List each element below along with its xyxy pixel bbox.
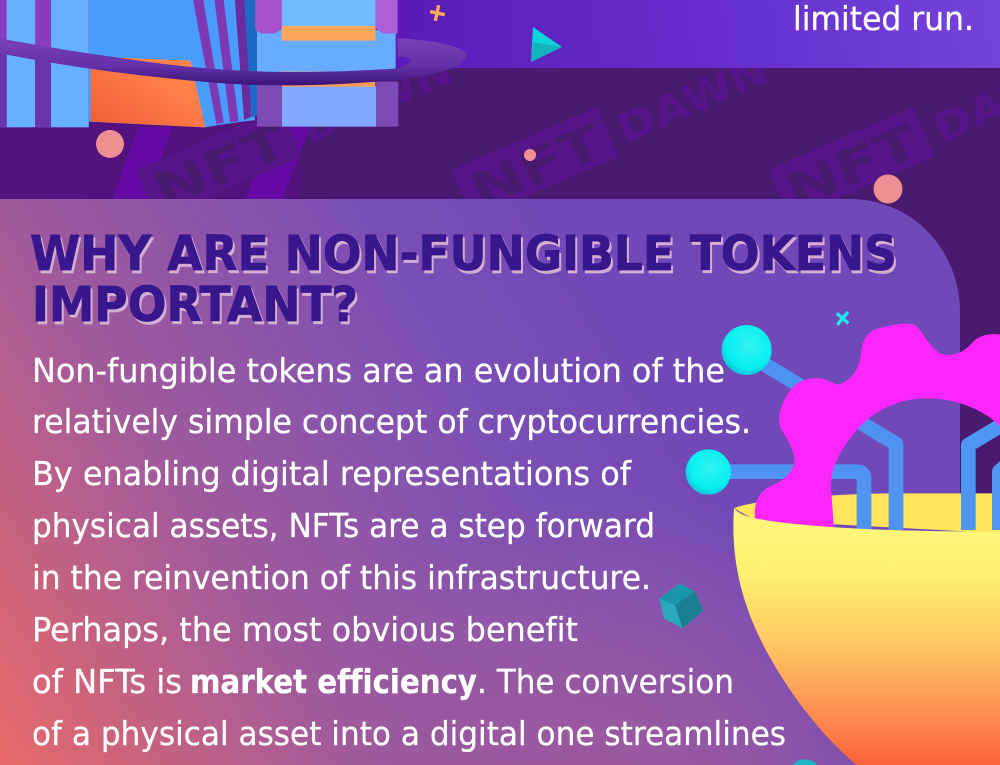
pink dot right	[874, 174, 902, 204]
line 7	[32, 662, 734, 701]
ball upper	[722, 325, 772, 375]
icon: orange plus	[428, 4, 446, 22]
right tube 1	[968, 425, 1000, 530]
watermark 2	[452, 68, 768, 199]
central blue block	[89, 0, 218, 127]
line 2: relatively simple concept of cryptocurrencies.	[32, 402, 751, 441]
watermark 2: NFT	[462, 114, 612, 220]
watermark 1	[136, 70, 452, 199]
heading line 1: WHY ARE NON-FUNGIBLE TOKENS	[30, 226, 897, 282]
pink dot small	[524, 149, 536, 161]
purple ring	[0, 38, 467, 85]
heading line 2: IMPORTANT?	[32, 277, 358, 333]
ball lower	[686, 449, 731, 495]
line 7 end: . The conversion	[477, 662, 734, 701]
circuit tubes	[725, 364, 1000, 530]
line 1: Non-fungible tokens are an evolution of the	[32, 351, 725, 390]
mid left tube	[725, 472, 864, 530]
bowl front	[733, 508, 1000, 765]
watermark 2: DAWN	[611, 47, 776, 153]
line 6: Perhaps, the most obvious benefit	[32, 610, 578, 649]
top purple band	[357, 0, 1000, 68]
watermark 1: NFT	[146, 114, 296, 220]
upper left tube	[764, 364, 896, 530]
line 7 start: of NFTs is	[32, 662, 182, 701]
panel: gradient card	[0, 199, 960, 765]
line 8: of a physical asset into a digital one streamlines	[32, 714, 786, 753]
watermark 3: NFT	[778, 114, 928, 220]
cyan cross	[831, 307, 854, 330]
gear	[755, 324, 1000, 528]
right tower	[255, 0, 398, 127]
diagonal stripes	[193, 0, 259, 125]
teal cube	[659, 583, 703, 628]
text: limited run: limited run.	[793, 0, 974, 38]
watermarks: NFT DAWN	[136, 68, 1000, 199]
orange block	[91, 57, 205, 127]
line 3: By enabling digital representations of	[32, 454, 632, 493]
watermark 3	[768, 86, 1000, 199]
pink dot left	[96, 130, 124, 158]
watermark 1: DAWN	[295, 47, 460, 153]
left columns	[0, 0, 89, 127]
illustration: gear in bowl	[659, 307, 1000, 765]
ball bottom	[791, 759, 819, 765]
illustration: blue buildings with ring	[0, 0, 467, 127]
line 4: physical assets, NFTs are a step forward	[32, 506, 655, 545]
bowl back inner	[734, 493, 1000, 533]
line 7 bold: market efficiency	[190, 662, 477, 701]
left purple floor	[0, 120, 300, 200]
body text	[32, 351, 786, 753]
line 5: in the reinvention of this infrastructure.	[32, 558, 651, 597]
right tube 2	[999, 467, 1000, 530]
icon: cyan triangle	[531, 27, 562, 62]
building shadow stripes	[113, 127, 310, 199]
heading	[30, 226, 897, 333]
